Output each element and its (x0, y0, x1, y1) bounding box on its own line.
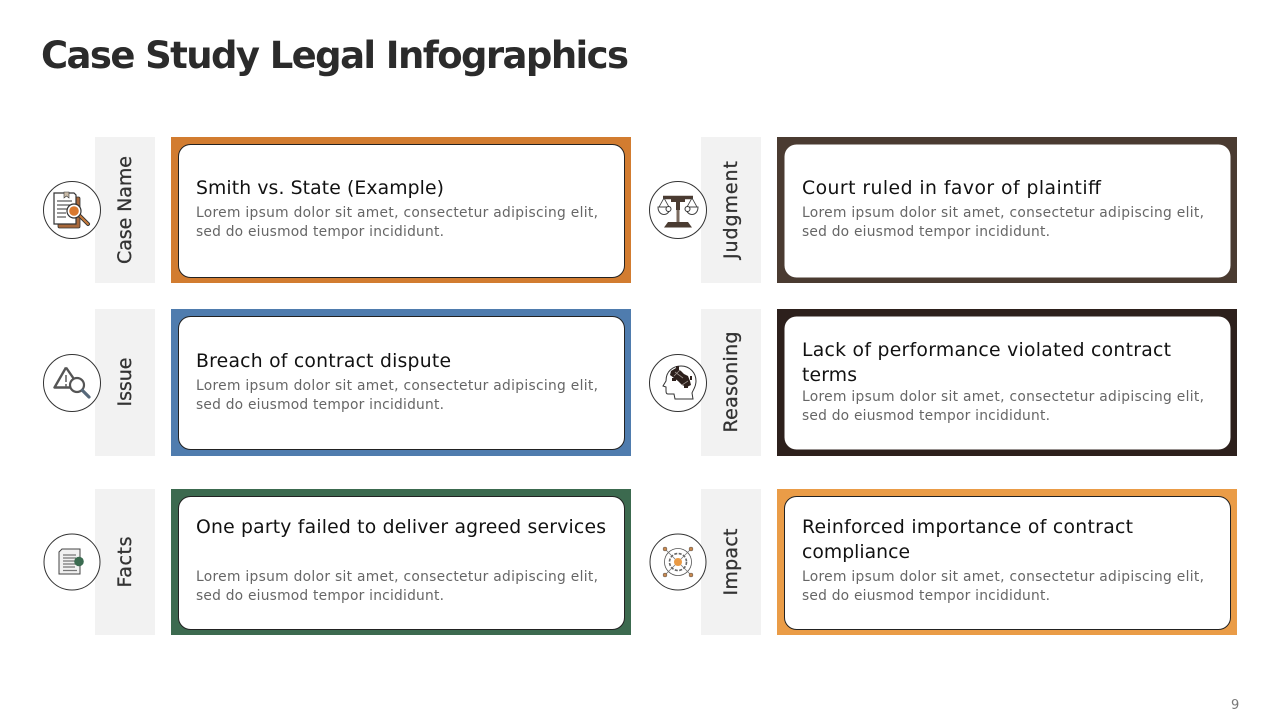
card: judgment: sed do eiusmod tempor incididunt. (802, 224, 1050, 240)
panel: case name (44, 137, 631, 283)
panel: facts (44, 489, 631, 635)
icon: gear network (650, 534, 706, 590)
card: impact: compliance (802, 542, 910, 563)
card: facts (171, 489, 631, 635)
side label: case name (95, 137, 155, 283)
side label: impact (701, 489, 761, 635)
card: case name: Lorem ipsum dolor sit amet, consectetur adipiscing elit, (196, 205, 598, 221)
page number: 9 (1231, 698, 1239, 713)
panel: issue (44, 309, 631, 456)
side label: issue: Issue (114, 358, 136, 406)
card: reasoning: sed do eiusmod tempor incididunt. (802, 408, 1050, 424)
side label: reasoning: Reasoning (720, 332, 742, 432)
card: issue: Lorem ipsum dolor sit amet, consectetur adipiscing elit, (196, 378, 598, 394)
panel: impact (650, 489, 1237, 635)
card: issue: sed do eiusmod tempor incididunt. (196, 397, 444, 413)
card: judgment: Lorem ipsum dolor sit amet, consectetur adipiscing elit, (802, 205, 1204, 221)
card: issue: Breach of contract dispute (196, 351, 451, 372)
card: reasoning: terms (802, 365, 857, 386)
card: facts: sed do eiusmod tempor incididunt. (196, 588, 444, 604)
card: impact (777, 489, 1237, 635)
card: case name (171, 137, 631, 283)
icon: head with puzzle (650, 354, 706, 412)
card: case name: sed do eiusmod tempor incididunt. (196, 224, 444, 240)
card: impact: Lorem ipsum dolor sit amet, consectetur adipiscing elit, (802, 569, 1204, 585)
card: judgment: Court ruled in favor of plaintiff (802, 178, 1102, 199)
card: issue (171, 309, 631, 456)
side label: impact: Impact (720, 528, 742, 596)
icon: warning with magnifier (44, 354, 100, 412)
card: case name: Smith vs. State (Example) (196, 178, 444, 199)
icon: document with magnifier (44, 182, 100, 238)
card: impact: Reinforced importance of contract (802, 517, 1133, 538)
card: judgment (777, 137, 1237, 283)
side label: issue (95, 309, 155, 456)
panel: reasoning (650, 309, 1237, 456)
title: Case Study Legal Infographics (41, 34, 629, 77)
side label: judgment (701, 137, 761, 283)
card: reasoning: Lorem ipsum dolor sit amet, consectetur adipiscing elit, (802, 389, 1204, 405)
icon: document with check (44, 534, 100, 590)
side label: facts (95, 489, 155, 635)
panel: judgment (650, 137, 1237, 283)
side label: reasoning (701, 309, 761, 456)
card: reasoning: Lack of performance violated contract (802, 340, 1171, 361)
card: facts: Lorem ipsum dolor sit amet, consectetur adipiscing elit, (196, 569, 598, 585)
card: facts: One party failed to deliver agreed services (196, 517, 606, 538)
side label: facts: Facts (114, 536, 136, 588)
side label: case name: Case Name (114, 156, 136, 264)
card: reasoning (777, 309, 1237, 456)
side label: judgment: Judgment (720, 161, 742, 260)
icon: scales of justice (650, 182, 706, 238)
card: impact: sed do eiusmod tempor incididunt. (802, 588, 1050, 604)
